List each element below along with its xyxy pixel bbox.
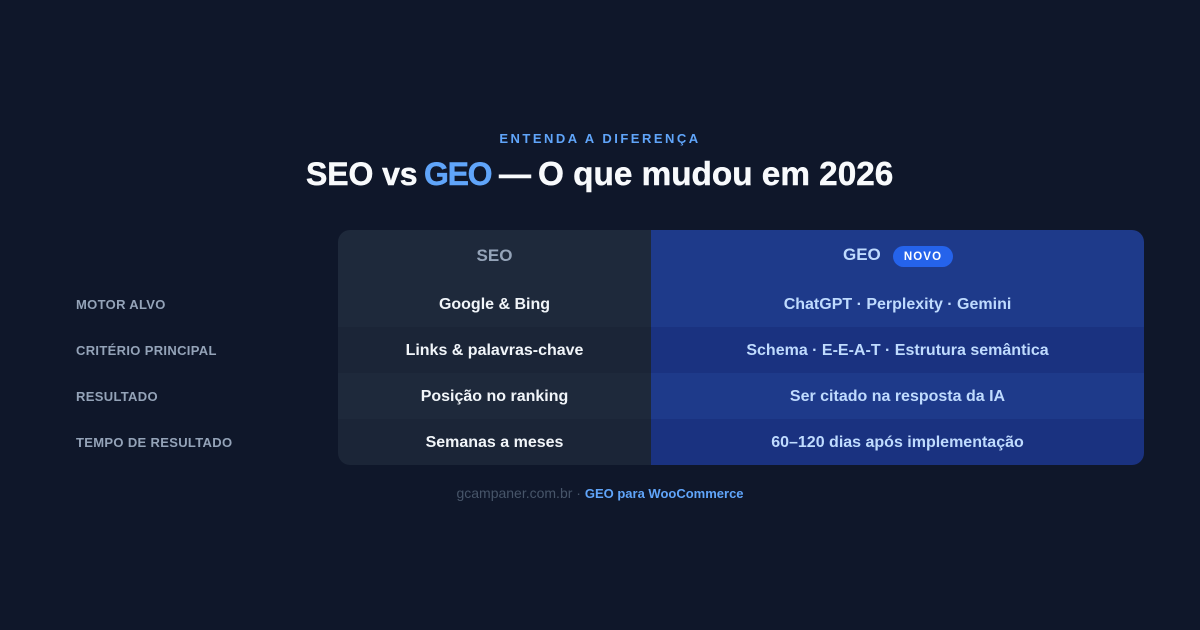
header: SEO <box>338 230 651 281</box>
row label: motor alvo: MOTOR ALVO <box>76 297 166 312</box>
row 3 SEO: Posição no ranking <box>421 388 568 405</box>
title: GEO <box>424 156 491 192</box>
title: O que mudou em 2026 <box>538 156 893 193</box>
title: SEO vs <box>306 156 417 192</box>
row 1 GEO: ChatGPT · Perplexity · Gemini <box>784 296 1011 313</box>
row 1 SEO: Google & Bing <box>439 296 550 313</box>
row label: critério principal: CRITÉRIO PRINCIPAL <box>76 343 217 358</box>
row label: tempo de resultado: TEMPO DE RESULTADO <box>76 435 232 450</box>
comparison table <box>338 230 1144 465</box>
row 2 GEO: Schema · E-E-A-T · Estrutura semântica <box>746 342 1049 359</box>
row 1 GEO <box>651 281 1144 327</box>
row 2 SEO <box>338 327 651 373</box>
row 4 SEO <box>338 419 651 465</box>
row 2 GEO <box>651 327 1144 373</box>
GEO heading: GEO <box>843 245 881 264</box>
row label: resultado: RESULTADO <box>76 389 158 404</box>
eyebrow label: ENTENDA A DIFERENÇA <box>499 131 701 146</box>
badge: novo: NOVO <box>904 251 942 263</box>
row 1 SEO <box>338 281 651 327</box>
row 4 GEO <box>651 419 1144 465</box>
header: GEO with badge <box>651 230 1144 281</box>
badge: novo <box>893 246 953 267</box>
row 4 GEO: 60–120 dias após implementação <box>771 434 1024 451</box>
title: — <box>499 156 531 192</box>
row 3 GEO: Ser citado na resposta da IA <box>790 388 1005 405</box>
header: SEO: SEO <box>477 246 512 265</box>
row 3 GEO <box>651 373 1144 419</box>
row 2 SEO: Links & palavras-chave <box>406 342 583 359</box>
row 4 SEO: Semanas a meses <box>426 434 563 451</box>
title <box>306 156 893 193</box>
footer: gcampaner.com.br · GEO para WooCommerce <box>456 485 744 501</box>
row 3 SEO <box>338 373 651 419</box>
